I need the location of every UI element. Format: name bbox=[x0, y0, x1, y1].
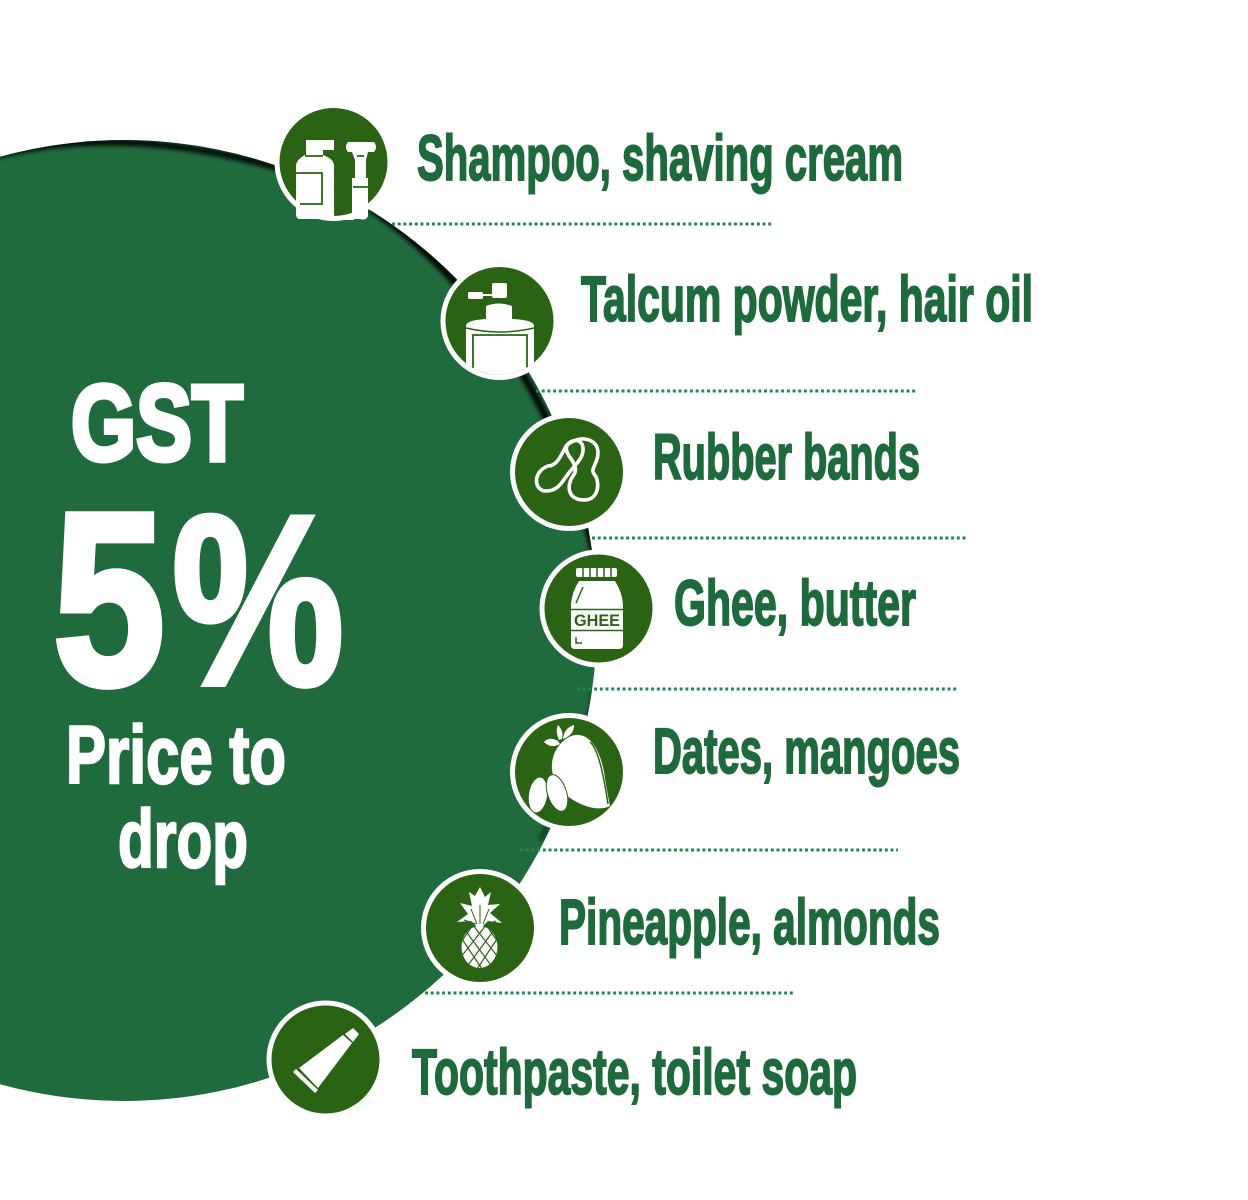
icon: ghee jar bbox=[542, 552, 655, 665]
label: Ghee, butter: Ghee, butter bbox=[674, 567, 916, 639]
label: Rubber bands: Rubber bands bbox=[653, 421, 920, 493]
heading: 5%: % bbox=[172, 466, 344, 736]
label: Shampoo, shaving cream: Shampoo, shaving cream bbox=[417, 122, 903, 194]
icon: ghee jar: GHEE bbox=[574, 611, 620, 630]
panel: large green circle bbox=[0, 140, 597, 1101]
text: Price to drop: Price to bbox=[66, 710, 286, 801]
heading: 5% bbox=[53, 462, 344, 737]
icon: pineapple bbox=[424, 872, 536, 984]
label: Dates, mangoes: Dates, mangoes bbox=[653, 715, 960, 787]
icon: shampoo and razor bbox=[277, 106, 390, 220]
label: Toothpaste, toilet soap: Toothpaste, toilet soap bbox=[412, 1036, 857, 1108]
icon: mango and dates bbox=[512, 716, 626, 828]
text: Price to drop: drop bbox=[118, 794, 248, 885]
text: Price to drop bbox=[66, 710, 286, 885]
heading: 5%: 5 bbox=[53, 462, 165, 737]
label: Pineapple, almonds: Pineapple, almonds bbox=[559, 886, 940, 958]
heading: GST: GST bbox=[71, 362, 243, 483]
icon: toothpaste tube bbox=[269, 1003, 382, 1116]
icon: rubber bands bbox=[512, 416, 626, 528]
icon: pump bottle bbox=[443, 264, 556, 380]
